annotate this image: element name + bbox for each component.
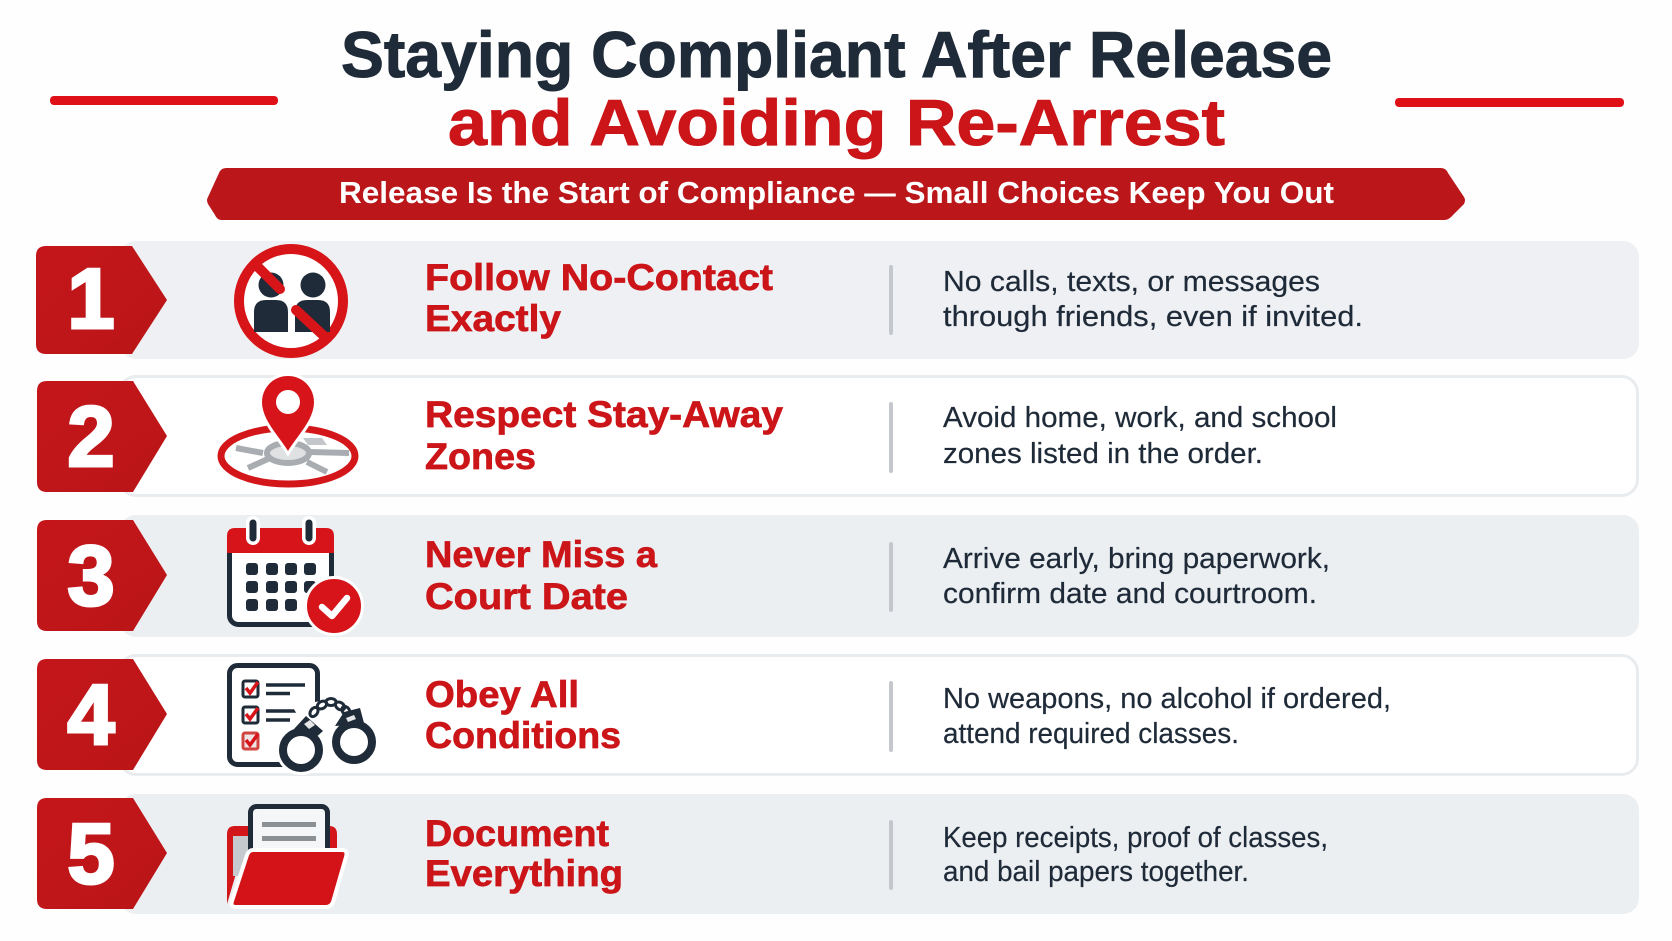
row 3 description: Arrive early, bring paperwork,	[943, 543, 1330, 575]
row 4: obey all conditions	[37, 656, 1638, 775]
row 3 number badge: 3	[67, 529, 115, 624]
row 2 number badge	[37, 381, 167, 492]
row 5 description: Keep receipts, proof of classes,	[943, 822, 1328, 854]
row 4 description: attend required classes.	[943, 718, 1239, 750]
row 5 description: and bail papers together.	[943, 856, 1249, 888]
row 2 number badge: 2	[67, 390, 115, 485]
row 5 heading: Everything	[425, 853, 623, 894]
row 1 panel	[120, 241, 1639, 359]
row 5 panel	[120, 794, 1639, 914]
row 2 description	[943, 402, 1337, 470]
row 1 description	[943, 266, 1363, 333]
row 4 heading	[425, 674, 621, 756]
row 2 heading: Zones	[425, 436, 536, 477]
row 1 heading	[425, 257, 773, 339]
row 3 description: confirm date and courtroom.	[943, 578, 1317, 610]
row 2: respect stay-away zones	[37, 376, 1638, 496]
right accent rule	[1395, 98, 1624, 107]
row 3 description	[943, 543, 1330, 610]
icon: map pin zone	[221, 376, 355, 484]
row 1 number badge	[36, 246, 167, 354]
row 3 number badge	[37, 520, 167, 631]
row 3 heading	[425, 534, 657, 617]
row 1 description: through friends, even if invited.	[943, 301, 1363, 333]
icon: calendar with check	[227, 523, 362, 634]
row 4 number badge	[37, 659, 167, 770]
row 1 heading: Exactly	[425, 298, 561, 339]
row 1 description: No calls, texts, or messages	[943, 266, 1320, 298]
icon: no contact	[239, 249, 343, 353]
row 1 heading: Follow No-Contact	[425, 257, 773, 298]
row 5 heading	[425, 813, 623, 894]
title line 1: Staying Compliant After Release	[341, 18, 1332, 91]
icon: folder with papers	[227, 806, 346, 907]
title line 2: and Avoiding Re-Arrest	[448, 86, 1225, 159]
row 3 heading: Never Miss a	[425, 534, 657, 575]
row 1: follow no-contact	[36, 241, 1639, 359]
row 2 heading: Respect Stay-Away	[425, 394, 783, 435]
row 2 description: zones listed in the order.	[943, 438, 1263, 470]
row 4 panel	[120, 656, 1638, 774]
icon: checklist and handcuffs	[230, 666, 380, 775]
row 5: document everything	[37, 794, 1639, 914]
row 4 heading: Conditions	[425, 715, 621, 756]
row 5 number badge: 5	[67, 807, 115, 902]
row 4 description	[943, 683, 1391, 750]
subtitle banner	[207, 168, 1465, 220]
title	[341, 18, 1332, 159]
row 3 heading: Court Date	[425, 576, 628, 617]
row 2 heading	[425, 394, 783, 477]
row 5 description	[943, 822, 1328, 888]
row 2 panel	[120, 376, 1638, 496]
row 3 panel	[120, 515, 1639, 637]
row 5 heading: Document	[425, 813, 609, 854]
row 4 description: No weapons, no alcohol if ordered,	[943, 683, 1391, 715]
row 3: never miss a court date	[37, 515, 1639, 637]
row 4 number badge: 4	[67, 668, 115, 763]
row 5 number badge	[37, 798, 167, 909]
subtitle banner: Release Is the Start of Compliance — Small Choices Keep You Out	[339, 175, 1334, 210]
left accent rule	[50, 96, 278, 105]
row 1 number badge: 1	[67, 252, 115, 347]
row 2 description: Avoid home, work, and school	[943, 402, 1337, 434]
row 4 heading: Obey All	[425, 674, 579, 715]
